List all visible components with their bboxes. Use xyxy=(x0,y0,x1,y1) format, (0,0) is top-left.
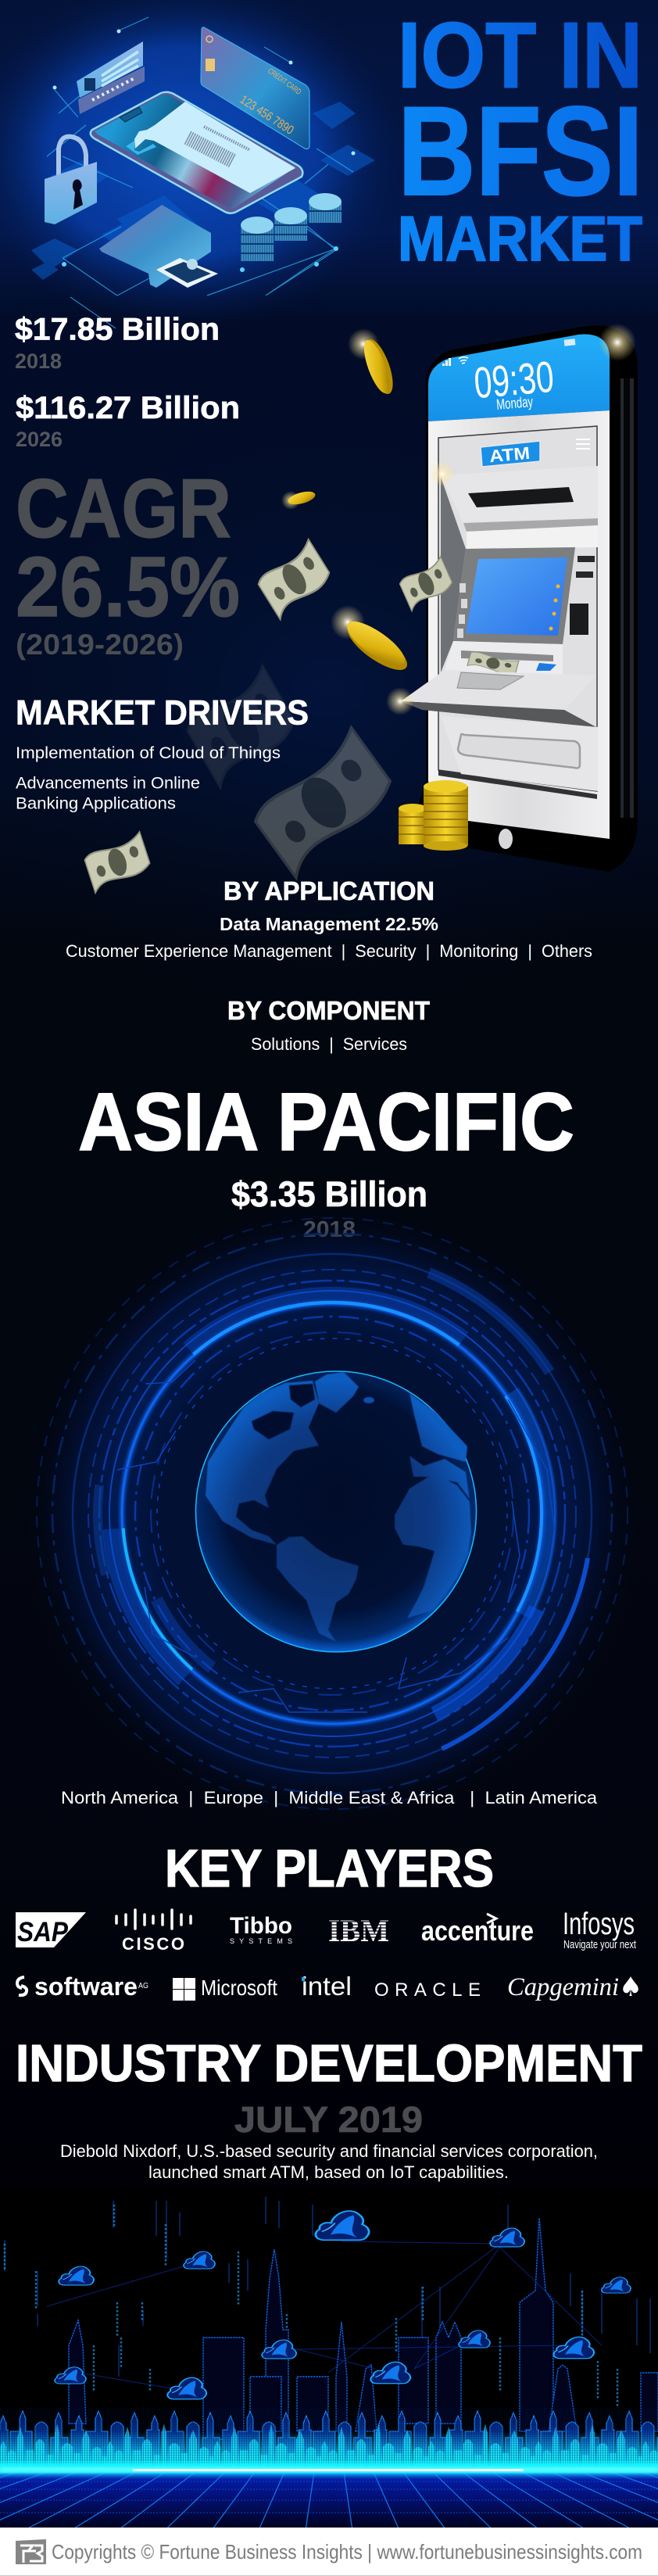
ATM badge xyxy=(481,441,540,467)
industry development: launched smart ATM, based on IoT capabilities. xyxy=(148,2162,509,2182)
ATM display xyxy=(453,547,595,644)
phone clock: 09:30 xyxy=(472,352,556,407)
by component: BY COMPONENT xyxy=(227,997,430,1026)
technology rings xyxy=(0,1176,658,1851)
market size 2018: 2018 xyxy=(15,349,62,373)
credit card xyxy=(201,27,309,149)
by application: Data Management 22.5% xyxy=(220,914,438,934)
logo: Microsoft: Microsoft xyxy=(201,1976,277,2000)
key players heading: KEY PLAYERS xyxy=(165,1839,494,1898)
cloud icons xyxy=(55,2211,631,2399)
logo: Accenture: accenture xyxy=(421,1915,534,1947)
bank note near ATM xyxy=(396,557,456,611)
logo: Intel: intel xyxy=(302,1972,352,2001)
region heading: $3.35 Billion xyxy=(231,1174,427,1214)
CAGR: (2019-2026) xyxy=(16,629,184,661)
bank note xyxy=(252,539,337,619)
region heading: ASIA PACIFIC xyxy=(78,1077,574,1168)
padlock xyxy=(45,137,97,224)
smartphone with receipt xyxy=(91,92,302,213)
smartphone with ATM xyxy=(401,325,638,872)
gold coin middle xyxy=(331,605,413,678)
perspective grid floor xyxy=(0,2470,658,2528)
industry development xyxy=(16,2034,642,2182)
dark bank note xyxy=(244,728,403,878)
logo: SAP xyxy=(16,1912,86,1947)
logo: Oracle: ORACLE xyxy=(374,1979,481,2001)
footer logo xyxy=(16,2539,46,2564)
industry development: JULY 2019 xyxy=(234,2099,423,2140)
market drivers xyxy=(16,694,309,813)
title xyxy=(398,3,643,274)
logo: Cisco: CISCO xyxy=(122,1934,184,1954)
skyline back layer xyxy=(0,2408,658,2470)
gold coin small xyxy=(281,489,316,510)
footer bar xyxy=(0,2528,658,2576)
dark background bank note xyxy=(178,666,305,788)
CAGR xyxy=(16,461,240,661)
market size 2018: $17.85 Billion xyxy=(15,313,220,347)
industry development: Diebold Nixdorf, U.S.-based security and financial services corporation, xyxy=(60,2141,598,2161)
market drivers: Banking Applications xyxy=(16,794,176,813)
CAGR: 26.5% xyxy=(16,539,240,635)
market size 2018 xyxy=(15,313,220,373)
logo: Infosys xyxy=(563,1907,637,1951)
other regions: North America | Europe | Middle East & Africa | Latin America xyxy=(61,1788,598,1807)
market drivers: MARKET DRIVERS xyxy=(16,694,309,732)
region heading xyxy=(78,1077,574,1242)
CAGR: CAGR xyxy=(16,461,231,555)
logo: Software AG: AG xyxy=(138,1982,148,1990)
phone clock: Monday xyxy=(495,394,534,414)
coin stacks xyxy=(241,193,342,261)
phone clock xyxy=(442,339,575,414)
network links xyxy=(47,2237,602,2388)
credit card: 123 456 7890 xyxy=(238,93,296,138)
by component xyxy=(227,997,430,1054)
region heading: 2018 xyxy=(303,1217,356,1242)
globe xyxy=(195,1371,477,1653)
credit card: CREDIT CARD xyxy=(266,67,302,97)
logo: SAP: SAP xyxy=(17,1917,69,1947)
logo: IBM: IBM xyxy=(328,1913,389,1948)
market drivers: Advancements in Online xyxy=(16,774,200,793)
market size 2026 xyxy=(16,391,240,451)
logo: Capgemini: ♠ xyxy=(619,1972,642,2003)
gold coin stacks xyxy=(386,324,636,851)
hero illustration: isometric mobile banking xyxy=(0,0,410,328)
continents xyxy=(206,1372,471,1642)
logo: Software AG: software xyxy=(34,1972,138,2001)
ATM keypad shelf xyxy=(401,670,596,727)
bank note lower left xyxy=(81,832,153,893)
wallet with bank notes xyxy=(99,205,218,288)
by application: Customer Experience Management | Security | Monitoring | Others xyxy=(66,941,592,961)
gold coin top xyxy=(348,328,399,397)
logo: Tibbo: Tibbo xyxy=(230,1913,292,1939)
market size 2026: 2026 xyxy=(16,428,63,451)
ATM badge: ATM xyxy=(488,443,531,466)
logo: Microsoft xyxy=(173,1976,277,2001)
by application: BY APPLICATION xyxy=(224,877,434,906)
by component: Solutions | Services xyxy=(251,1034,407,1054)
identity card xyxy=(77,41,145,114)
tall towers xyxy=(69,2218,658,2447)
logo: Tibbo: SYSTEMS xyxy=(230,1937,292,1945)
digital city skyline xyxy=(0,2189,658,2528)
market drivers: Implementation of Cloud of Things xyxy=(16,744,281,762)
logo: Cisco xyxy=(116,1910,191,1954)
by application xyxy=(66,877,592,961)
horizon glow xyxy=(0,2461,658,2480)
logo: Capgemini: Capgemini xyxy=(507,1973,619,2001)
skyline front layer xyxy=(0,2424,658,2470)
market size 2026: $116.27 Billion xyxy=(16,391,240,425)
